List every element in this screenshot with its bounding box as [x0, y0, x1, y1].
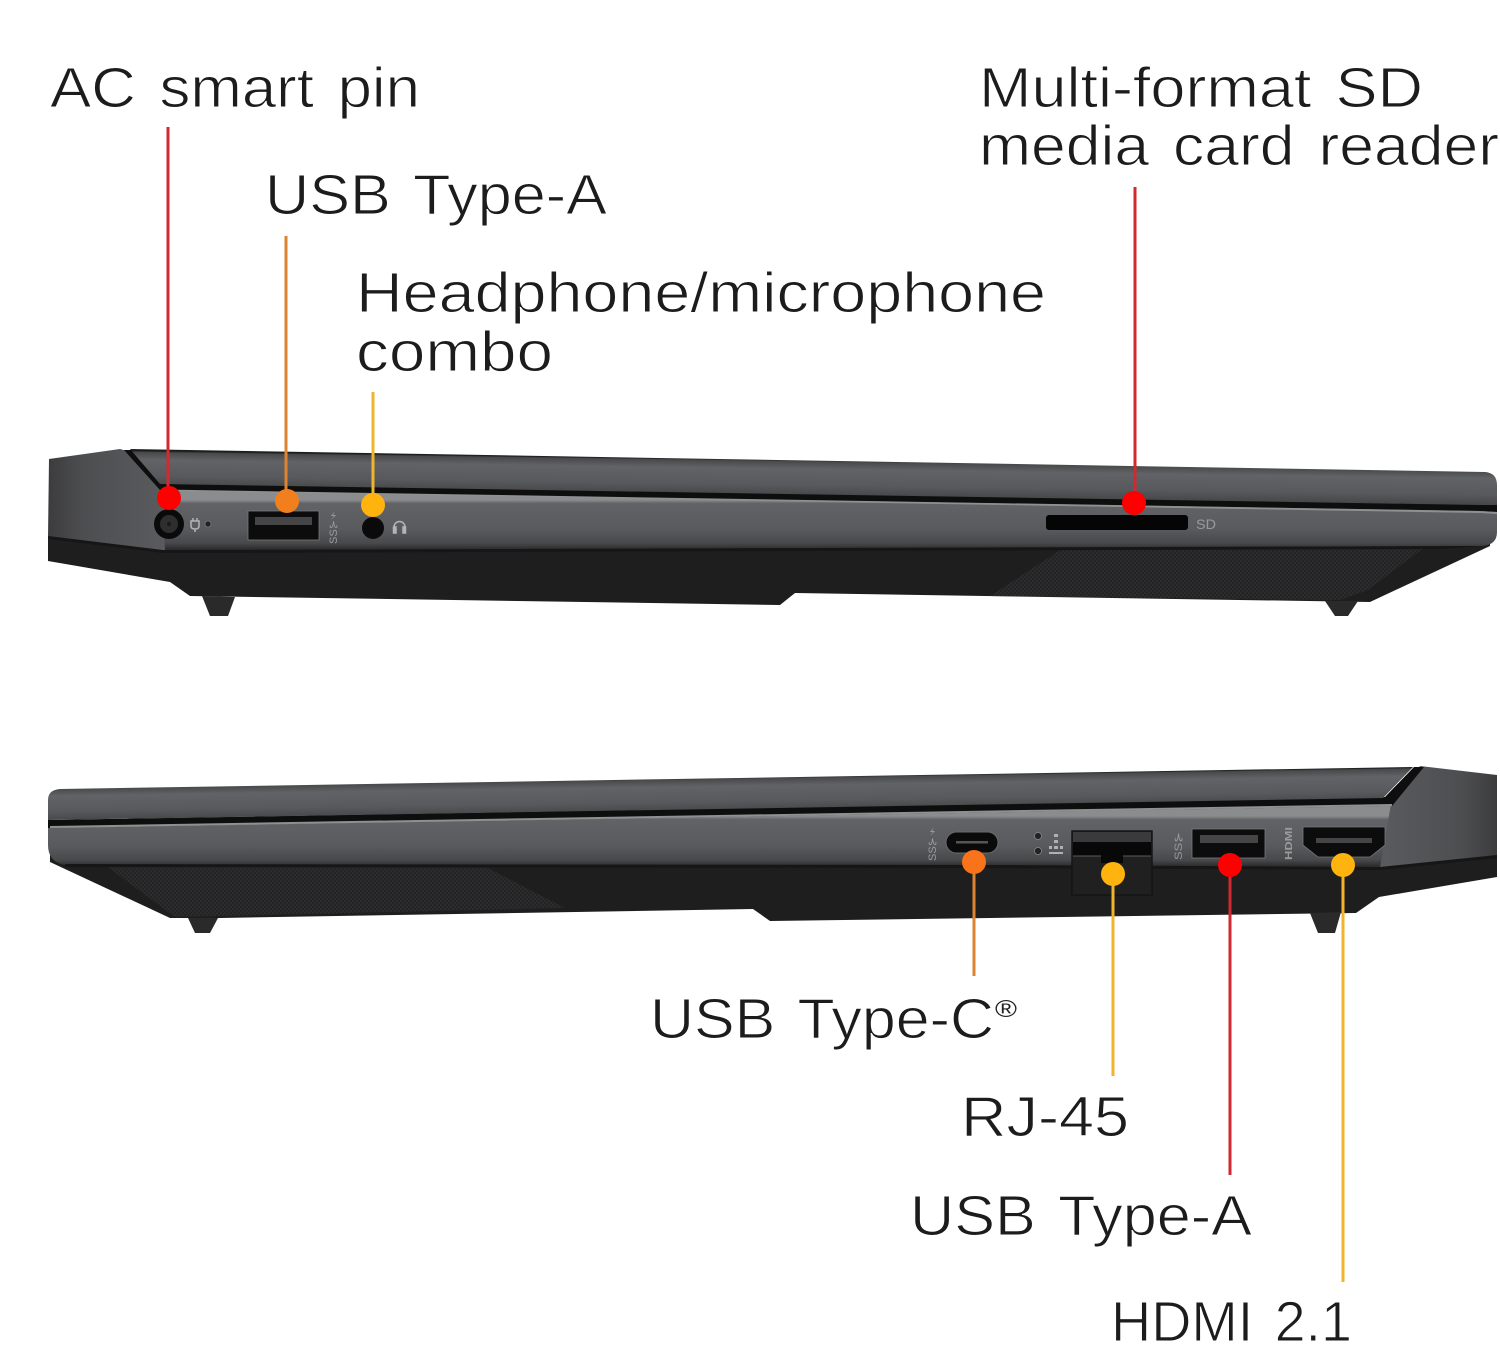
rubber foot left — [188, 918, 218, 933]
callout: Multi-format SD media card reader: Multi-format SD — [979, 56, 1423, 120]
rubber foot right — [1325, 601, 1358, 616]
closed lid — [48, 767, 1413, 820]
AC power jack — [154, 509, 184, 539]
callout: USB Type-C — [650, 850, 1017, 1051]
callout: RJ-45: RJ-45 — [961, 1085, 1129, 1149]
highlight line — [50, 804, 1392, 828]
callout: USB Type-A right — [910, 853, 1252, 1248]
callout: Headphone/microphone combo — [356, 261, 1046, 517]
speaker mesh — [105, 864, 565, 917]
callout: Multi-format SD media card reader — [979, 56, 1499, 515]
USB-A port — [248, 511, 319, 540]
icon: headset — [394, 522, 406, 533]
highlight line — [162, 490, 1497, 514]
gray base body — [160, 490, 1497, 551]
callout: USB Type-A left — [265, 163, 607, 513]
gray base body — [48, 806, 1392, 868]
base bottom edge — [65, 855, 1497, 870]
SD label: SD — [1196, 516, 1216, 532]
icon: SS label USB-C: SS⊱ — [927, 837, 939, 861]
callout: USB Type-A right: USB Type-A — [910, 1184, 1252, 1248]
callout: Multi-format SD media card reader: media card reader — [979, 114, 1499, 178]
callout: USB Type-C: ® — [995, 996, 1017, 1023]
callout: HDMI 2.1 — [1111, 853, 1355, 1345]
USB-A port — [1192, 829, 1265, 858]
black underside — [48, 535, 1490, 605]
callout: RJ-45 — [961, 862, 1129, 1149]
HDMI port — [1303, 827, 1385, 857]
callout: AC smart pin — [50, 56, 420, 510]
icon: SS label USB-A: SS⊱ — [1173, 832, 1185, 860]
USB-C port — [946, 832, 998, 853]
left hinge corner — [48, 449, 165, 551]
base bottom edge — [48, 536, 1482, 553]
laptop right side view — [48, 766, 1497, 933]
rubber foot left — [202, 596, 235, 616]
screen gap — [124, 450, 1497, 512]
status LEDs — [1034, 832, 1042, 854]
callout: AC smart pin: AC smart pin — [50, 56, 420, 120]
headphone jack — [362, 517, 384, 539]
HDMI label: HDMI — [1284, 827, 1295, 860]
right hinge corner — [1380, 766, 1497, 868]
icon: power plug — [191, 518, 199, 532]
speaker mesh — [990, 547, 1425, 600]
closed lid — [130, 449, 1497, 505]
RJ-45 port — [1072, 831, 1152, 895]
charge LED — [205, 521, 211, 527]
SD card slot — [1046, 515, 1188, 530]
callout: USB Type-A left: USB Type-A — [265, 163, 607, 227]
icon: SS USB label: SS⊱ — [328, 520, 340, 544]
callout: Headphone/microphone combo: combo — [356, 320, 553, 384]
rubber foot right — [1310, 912, 1341, 933]
callout: USB Type-C: USB Type-C — [650, 987, 994, 1051]
icon: network — [1049, 834, 1063, 854]
laptop left side view — [48, 449, 1497, 616]
screen gap — [48, 767, 1424, 828]
black underside — [50, 850, 1497, 921]
callout: Headphone/microphone combo: Headphone/microphone — [356, 261, 1046, 325]
